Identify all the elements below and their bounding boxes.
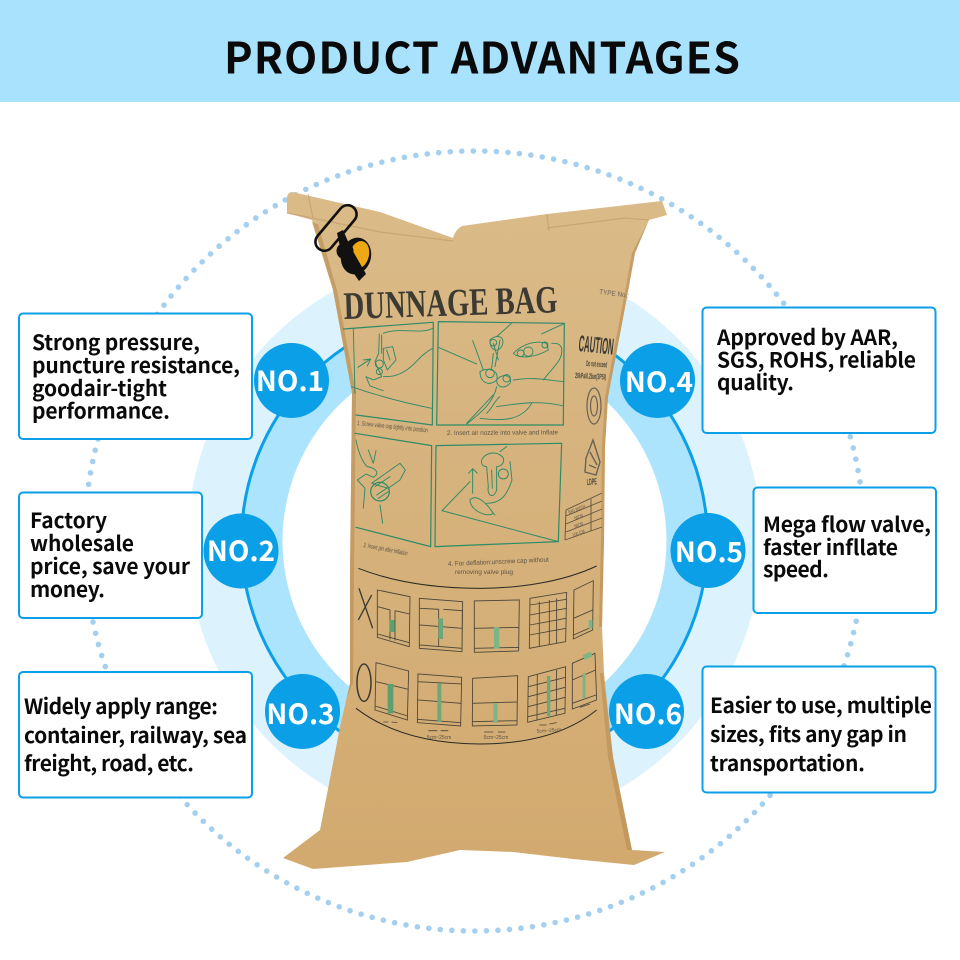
badge: NO.3: NO.3: [266, 693, 335, 733]
size table: [565, 493, 602, 540]
text box 2: Factory: [30, 505, 107, 535]
text box 6: sizes, fits any gap in: [710, 719, 907, 749]
text box 6: [702, 666, 936, 792]
size table: 60CM: [574, 513, 584, 522]
text box 1: [19, 314, 252, 439]
text box 5: faster infllate: [763, 532, 898, 562]
badge: NO.6: NO.6: [614, 693, 682, 733]
size table: 80CM: [574, 521, 584, 530]
gap labels: 5cm~25cm: [484, 735, 508, 741]
placement diagram: [356, 566, 597, 744]
title: PRODUCT ADVANTAGES: [224, 24, 740, 86]
air valve: [312, 202, 375, 281]
bag side shading: [312, 222, 648, 850]
panel 2: insert nozzle: [437, 322, 564, 425]
text box 5: Mega flow valve,: [763, 509, 931, 539]
text box 5: speed.: [763, 554, 829, 584]
caution column: [565, 330, 615, 540]
top collar fold: [287, 194, 649, 241]
text box 6: Easier to use, multiple: [710, 690, 932, 720]
bag heading: DUNNAGE BAG: [343, 278, 558, 328]
text box 2: money.: [30, 574, 105, 604]
panel 3: insert pin: [355, 433, 432, 547]
outer pale ring: [188, 254, 762, 828]
right mark: [357, 664, 371, 701]
text box 3: container, railway, sea: [24, 720, 247, 750]
caution column: LDPE: [586, 476, 597, 487]
badge: NO.5: [670, 513, 746, 588]
badge: NO.4: [620, 343, 695, 418]
text box 3: [19, 672, 252, 798]
gap labels: [427, 727, 561, 741]
caution column: Do not exceed: [586, 359, 607, 369]
white centre: [282, 349, 666, 733]
badge: NO.6: [609, 674, 684, 749]
text box 2: wholesale: [30, 528, 134, 558]
badge: NO.4: NO.4: [625, 361, 693, 401]
valve yellow cap: [337, 234, 375, 278]
text box 1: performance.: [32, 396, 170, 426]
text box 4: Approved by AAR,: [716, 322, 898, 352]
badge: NO.1: NO.1: [256, 360, 324, 400]
caution column: 20kPa/0.2bar(3PSI): [575, 371, 606, 382]
badge: NO.1: [254, 343, 329, 418]
text box 3: freight, road, etc.: [24, 748, 194, 778]
instruction captions: 3. Insert pin after Inflation: [363, 542, 408, 558]
row 2 containers: [375, 652, 597, 726]
size table: 100 CM: [572, 529, 586, 539]
panel 4: deflation: [435, 443, 562, 547]
instruction captions: 4. For deflation:unscrew cap without: [448, 557, 549, 568]
text box 4: quality.: [717, 367, 794, 397]
dunnage bag: [283, 192, 667, 869]
valve black plug: [336, 230, 366, 281]
badge: NO.2: [204, 514, 278, 588]
instruction captions: removing valve plug: [455, 569, 513, 576]
panel 1: screw cap: [343, 322, 433, 425]
instruction captions: [357, 420, 558, 576]
wrong mark: [358, 588, 373, 628]
badge: NO.3: [265, 674, 340, 749]
instruction captions: 1. Screw valve cap tightly into position: [357, 420, 428, 434]
text box 6: transportation.: [710, 748, 865, 778]
instruction panels: [343, 322, 564, 547]
header band: [0, 0, 960, 102]
row 1 containers: [377, 581, 593, 652]
badge: NO.2: NO.2: [207, 530, 275, 570]
text box 3: Widely apply range:: [24, 691, 218, 721]
inner light blue ring: [242, 308, 708, 774]
text box 2: [19, 492, 202, 618]
recycling mark: [587, 388, 601, 424]
gap labels: 5cm~25cm: [536, 727, 561, 735]
text box 2: price, save your: [30, 551, 191, 581]
dunnage bag: CAUTION: [577, 330, 615, 360]
text box 5: [754, 488, 936, 613]
size table: BAG WIDTH: [568, 504, 587, 516]
gap labels: 5cm~25cm: [427, 735, 451, 741]
text box 1: Strong pressure,: [32, 327, 200, 357]
valve handle loop: [312, 202, 360, 254]
dotted outer circle: [84, 151, 864, 931]
type number label: TYPE No.:: [599, 289, 629, 300]
text box 1: puncture resistance,: [32, 350, 240, 380]
instruction captions: 2. Insert air nozzle into valve and Inflate: [447, 429, 558, 437]
LDPE mark: [585, 440, 600, 475]
bag body: [283, 192, 667, 869]
badge: NO.5: NO.5: [675, 531, 743, 571]
text box 4: [702, 308, 936, 433]
gap dimensions: [383, 704, 590, 732]
text box 1: goodair-tight: [32, 373, 167, 403]
diagram frame: [356, 566, 597, 744]
text box 4: SGS, ROHS, reliable: [717, 344, 916, 374]
